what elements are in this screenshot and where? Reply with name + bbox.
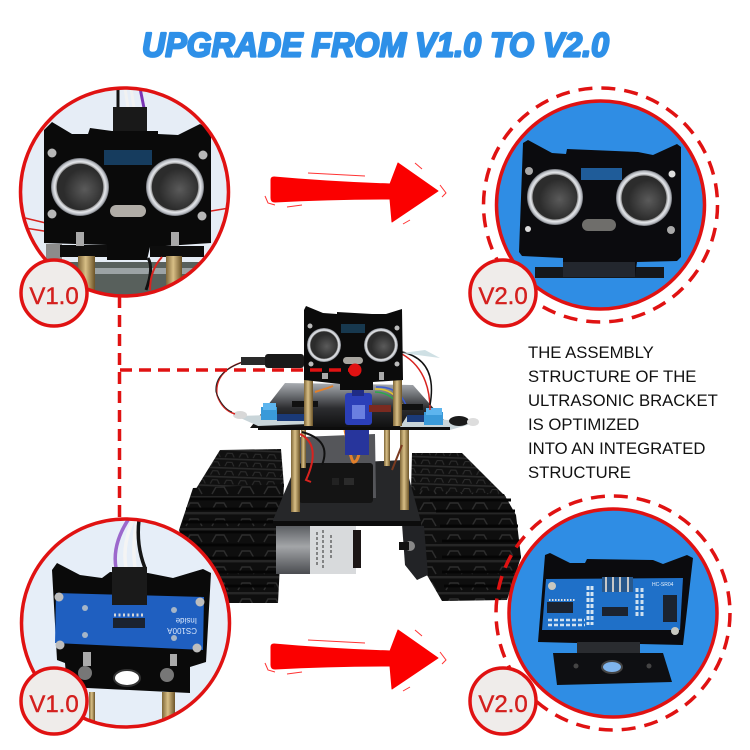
left track <box>179 449 284 603</box>
red and black jumper wires <box>217 361 246 414</box>
badge: V1.0 bottom: V1.0 <box>29 691 79 718</box>
description text: INTO AN INTEGRATED <box>528 439 705 458</box>
black audio cable <box>241 354 304 368</box>
arrow: top <box>265 163 446 224</box>
badge: V1.0 top <box>21 260 87 326</box>
upper plate <box>236 383 478 430</box>
description text: IS OPTIMIZED <box>528 415 639 434</box>
description text: ULTRASONIC BRACKET <box>528 391 718 410</box>
title: UPGRADE FROM V1.0 TO V2.0 <box>142 26 609 64</box>
photo: bottom right V2.0 <box>496 496 730 730</box>
connector target dot <box>348 364 362 376</box>
photo: bottom left V1.0 <box>20 518 232 730</box>
badge: V1.0 top: V1.0 <box>29 283 79 310</box>
photo: bottom left V1.0: CS100A <box>167 626 197 635</box>
description text <box>528 343 718 482</box>
badge: V2.0 top: V2.0 <box>478 283 528 310</box>
photo: bottom right V2.0: HC-SR04 <box>652 582 674 588</box>
badge: V1.0 bottom <box>21 668 87 734</box>
photo: bottom left V1.0: Inside <box>175 616 197 625</box>
description text: STRUCTURE <box>528 463 631 482</box>
badge: V2.0 top <box>470 260 536 326</box>
central robot tank <box>179 306 521 603</box>
lower chassis plate <box>273 460 421 526</box>
colored wires <box>375 392 402 410</box>
motor <box>276 524 428 580</box>
right track <box>411 453 521 601</box>
badge: V2.0 bottom: V2.0 <box>478 691 528 718</box>
lower brass standoffs <box>291 426 409 512</box>
wires lower <box>300 434 313 482</box>
right sensor module <box>395 404 479 426</box>
servo motor <box>345 388 372 455</box>
left sensor module <box>233 401 318 421</box>
upper brass standoffs <box>304 378 402 426</box>
arrow: bottom <box>265 630 446 691</box>
photo: top right V2.0 <box>484 88 718 322</box>
description text: STRUCTURE OF THE <box>528 367 696 386</box>
photo: top left V1.0 <box>20 88 230 298</box>
battery box <box>299 434 376 503</box>
description text: THE ASSEMBLY <box>528 343 654 362</box>
dashed connector lines <box>120 296 350 520</box>
sensor head <box>304 306 403 390</box>
badge: V2.0 bottom <box>470 668 536 734</box>
